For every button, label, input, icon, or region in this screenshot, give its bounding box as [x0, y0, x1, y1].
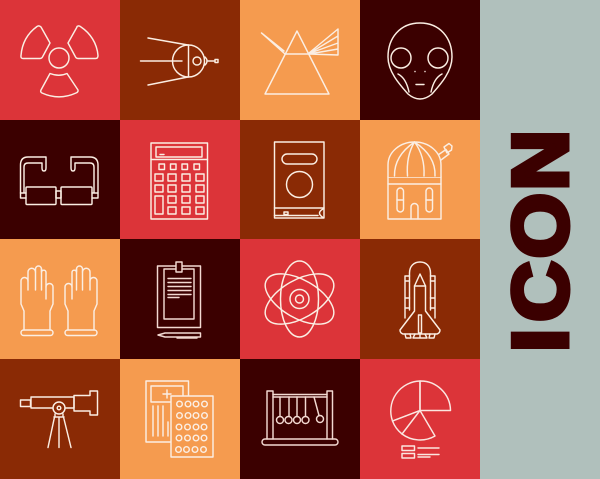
tile: goggles [0, 120, 120, 239]
icon: calculation sheets [146, 381, 213, 457]
icon: observatory [388, 142, 452, 219]
icon: alien head [388, 23, 452, 99]
tile: clipboard [120, 239, 240, 359]
icon: book [274, 142, 324, 218]
icon: newton's cradle [262, 391, 338, 445]
tile: newton's cradle [240, 359, 360, 479]
icon: telescope on tripod [20, 391, 98, 448]
tile: space shuttle [360, 239, 480, 359]
tile: gloves [0, 239, 120, 359]
tile: observatory [360, 120, 480, 239]
icon: safety glasses [20, 157, 98, 204]
tile: calculation sheets [120, 359, 240, 479]
tile: alien [360, 0, 480, 120]
icon: sputnik satellite [140, 38, 218, 85]
icon: radiation symbol [21, 26, 98, 97]
tile: pie chart [360, 359, 480, 479]
icon: atom [257, 261, 342, 337]
panel: side panel with vertical ICON title [480, 0, 600, 479]
tile: prism [240, 0, 360, 120]
tile: calculator [120, 120, 240, 239]
icon: gloves [21, 266, 97, 336]
tile: telescope [0, 359, 120, 479]
icon: clipboard and pen [158, 262, 200, 338]
tile: sputnik [120, 0, 240, 120]
icon: calculator [151, 143, 208, 219]
title: ICON: ICON [497, 130, 584, 352]
tile: book [240, 120, 360, 239]
tile: radiation [0, 0, 120, 120]
tile: atom [240, 239, 360, 359]
icon: pie chart with legend [391, 381, 450, 458]
icon: light prism [262, 29, 338, 94]
icon: space shuttle [400, 262, 440, 338]
